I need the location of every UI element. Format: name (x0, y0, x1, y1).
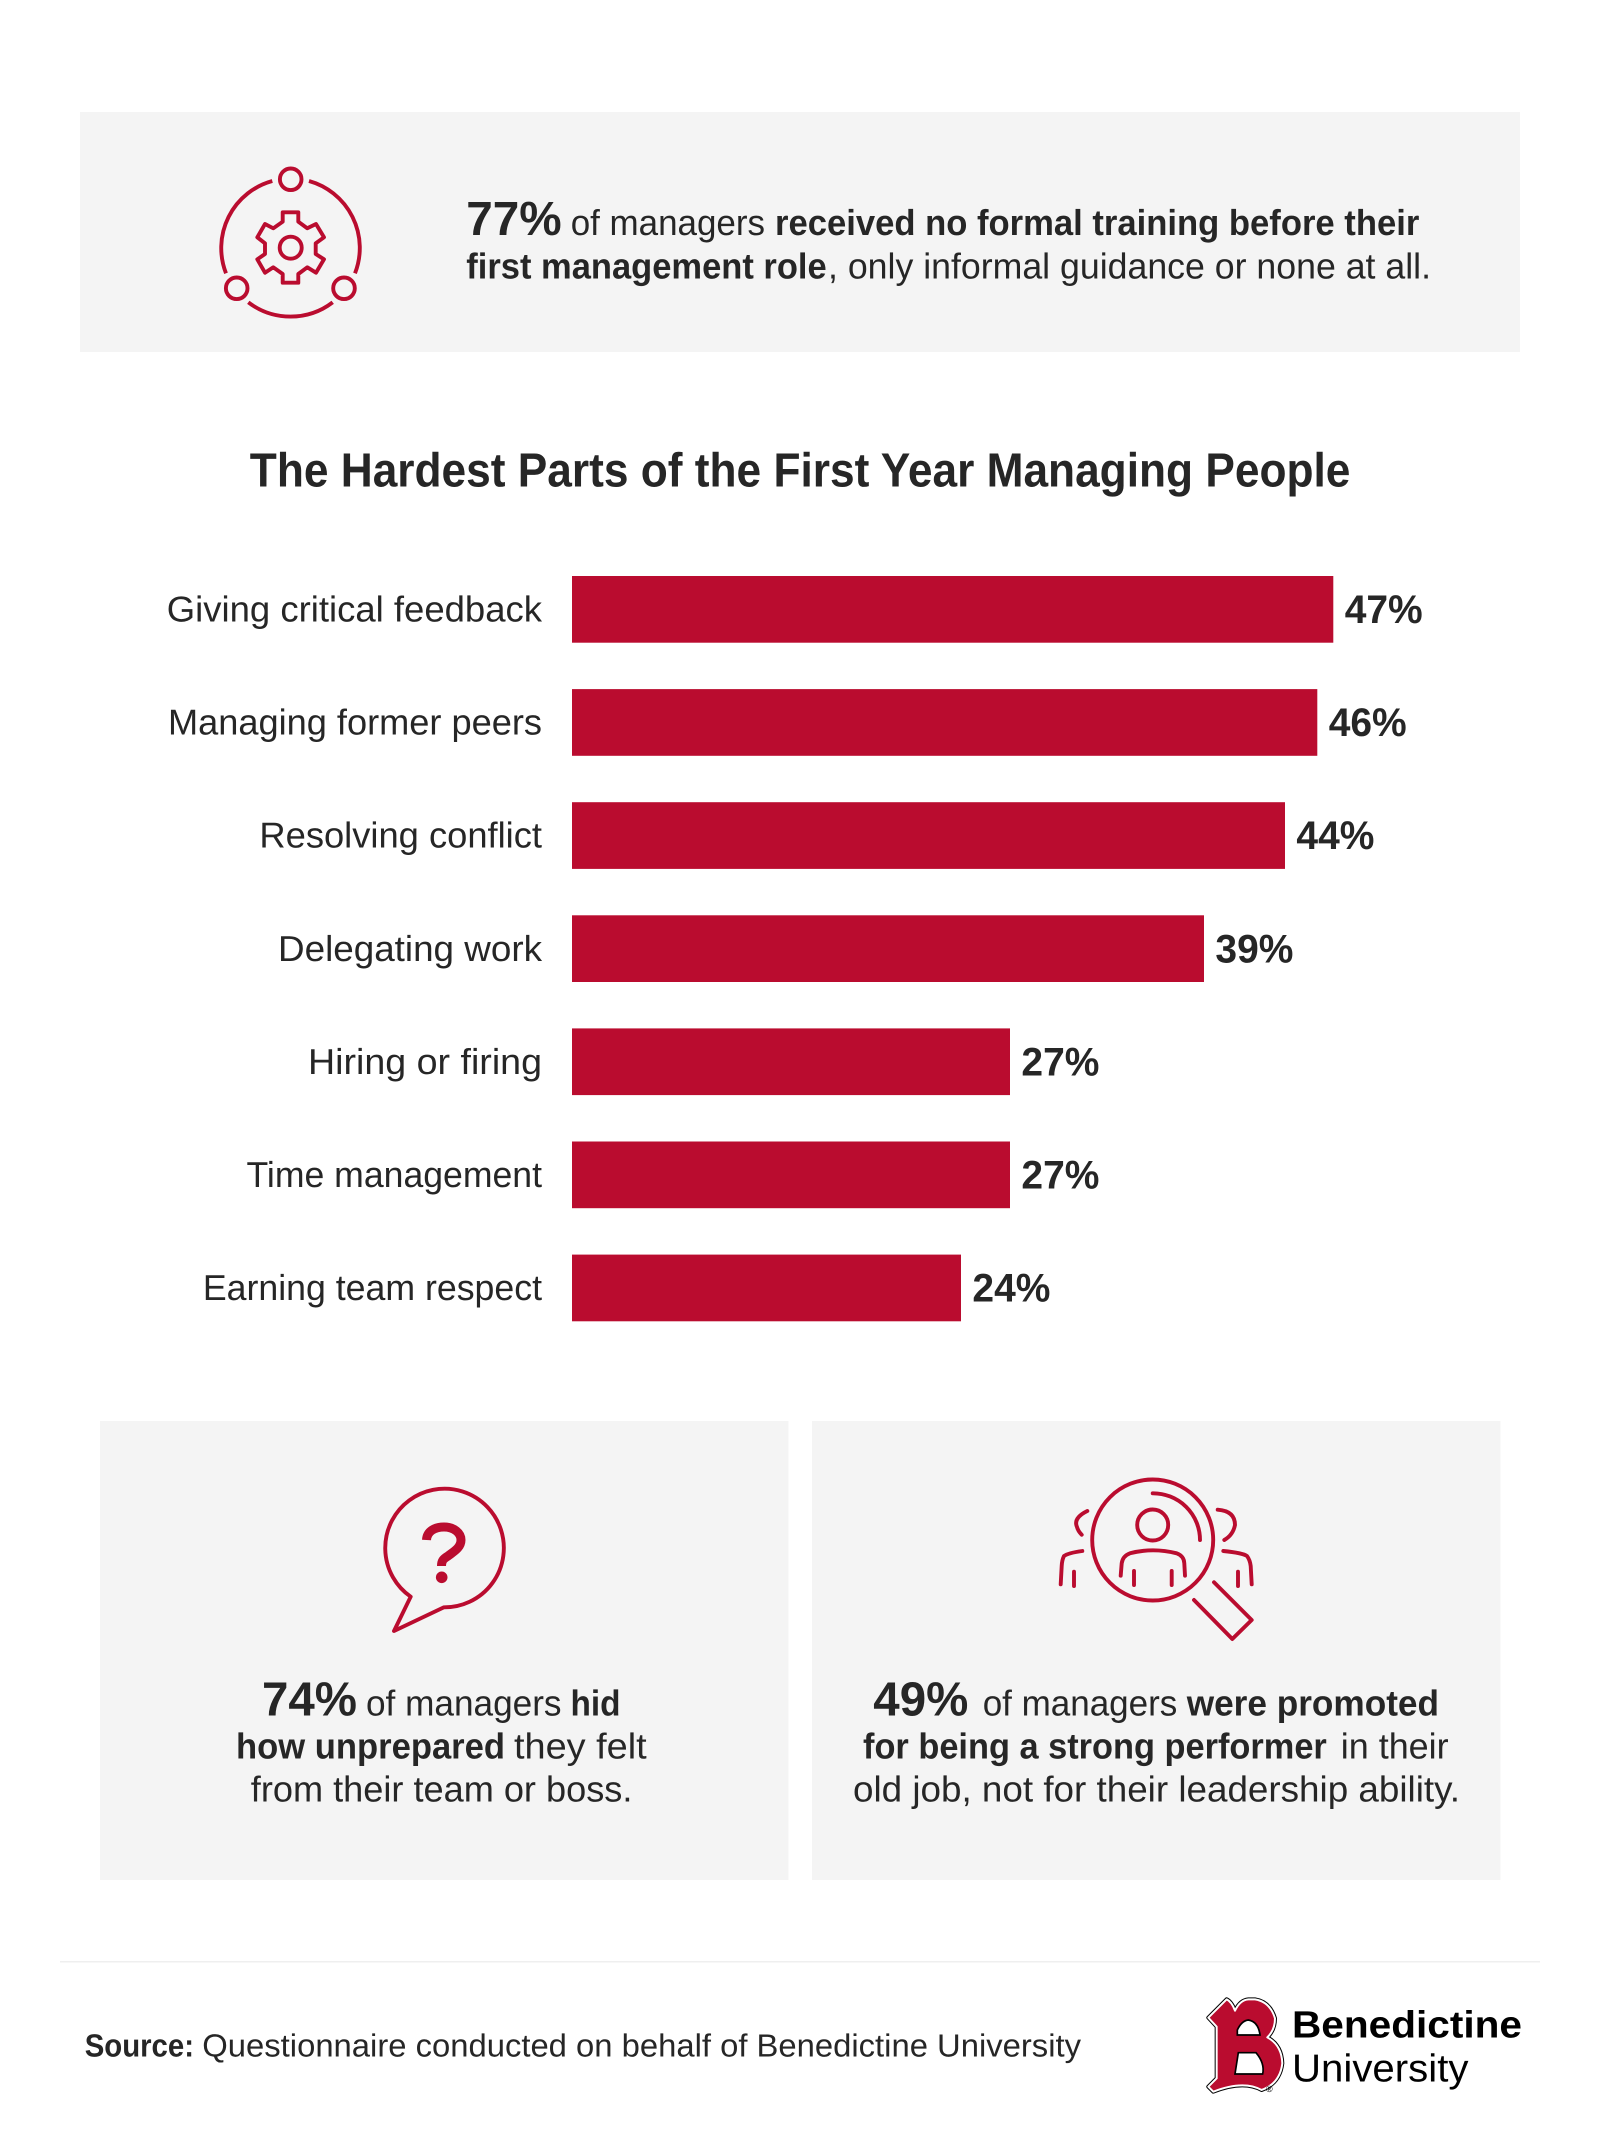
text: 74% statement: they felt (514, 1726, 647, 1766)
icon: question speech bubble (385, 1489, 504, 1631)
panel: 49% promoted for performance (812, 1421, 1500, 1880)
source note: Source: (85, 2027, 194, 2063)
bar row: Giving critical feedback 47%: Giving critical feedback (167, 588, 543, 630)
bar row: Managing former peers 46% (168, 689, 1407, 756)
text: 49% statement: old job, not for their leadership ability. (853, 1769, 1460, 1810)
text: 49% statement: 49% (873, 1674, 968, 1727)
bar row: Delegating work 39% (278, 915, 1293, 982)
bar row: Managing former peers 46%: 46% (1329, 701, 1407, 745)
bar row: Resolving conflict 44% (259, 802, 1374, 869)
text: 77% statement: received no formal training before their (775, 202, 1419, 243)
text: 77% statement (466, 193, 1431, 286)
bar row: Hiring or firing 27%: Hiring or firing (308, 1041, 542, 1082)
text: 74% statement: how unprepared (236, 1726, 505, 1766)
bar row: Giving critical feedback 47%: 47% (1345, 588, 1423, 632)
panel: 74% hid unpreparedness (100, 1421, 788, 1880)
text: 49% statement: for being a strong performer (863, 1726, 1327, 1766)
text: 74% statement: 74% (262, 1674, 357, 1727)
text: 49% statement: were promoted (1186, 1683, 1439, 1724)
bar row: Time management 27%: Time management (246, 1154, 542, 1195)
icon: magnifier over people (1061, 1480, 1252, 1639)
bar row: Delegating work 39%: 39% (1215, 927, 1293, 971)
text: 74% statement: of managers (366, 1683, 562, 1724)
text: 77% statement: first management role (466, 245, 827, 286)
bar chart: hardest parts (167, 576, 1423, 1321)
text: 49% statement: of managers (983, 1683, 1177, 1724)
chart title: The Hardest Parts of the First Year Managing People (250, 444, 1350, 498)
bar row: Earning team respect 24%: 24% (972, 1267, 1050, 1311)
bar row: Delegating work 39%: Delegating work (278, 928, 543, 969)
bar row: Time management 27%: 27% (1021, 1154, 1099, 1198)
text: 49% statement (853, 1674, 1460, 1810)
bar row: Resolving conflict 44%: Resolving conflict (259, 815, 542, 856)
bar row: Hiring or firing 27% (308, 1028, 1099, 1095)
text: 74% statement: from their team or boss. (251, 1769, 632, 1810)
text: 74% statement (236, 1674, 647, 1810)
logo: Benedictine University (1208, 1999, 1522, 2094)
text: 49% statement: in their (1341, 1726, 1449, 1766)
text: 77% statement: of managers (571, 202, 765, 243)
bar row: Managing former peers 46%: Managing former peers (168, 702, 542, 743)
text: 74% statement: hid (570, 1683, 620, 1724)
text: 77% statement: 77% (466, 193, 562, 246)
text: 77% statement: , only informal guidance or none at all. (828, 245, 1431, 286)
source note: Questionnaire conducted on behalf of Benedictine University (202, 2027, 1081, 2063)
icon: varsity letter B (1208, 1999, 1282, 2092)
bar row: Time management 27% (246, 1142, 1099, 1208)
bar row: Hiring or firing 27%: 27% (1021, 1040, 1099, 1084)
logo: Benedictine University: ® (1266, 2084, 1273, 2094)
panel: 77% no formal training (80, 112, 1520, 352)
bar row: Earning team respect 24% (203, 1255, 1050, 1321)
logo: Benedictine University: Benedictine (1292, 2004, 1522, 2046)
bar row: Earning team respect 24%: Earning team respect (203, 1267, 542, 1308)
icon: gear with orbit circles (221, 168, 360, 317)
bar row: Giving critical feedback 47% (167, 576, 1423, 643)
logo: Benedictine University: University (1292, 2048, 1469, 2091)
bar row: Resolving conflict 44%: 44% (1296, 814, 1374, 858)
